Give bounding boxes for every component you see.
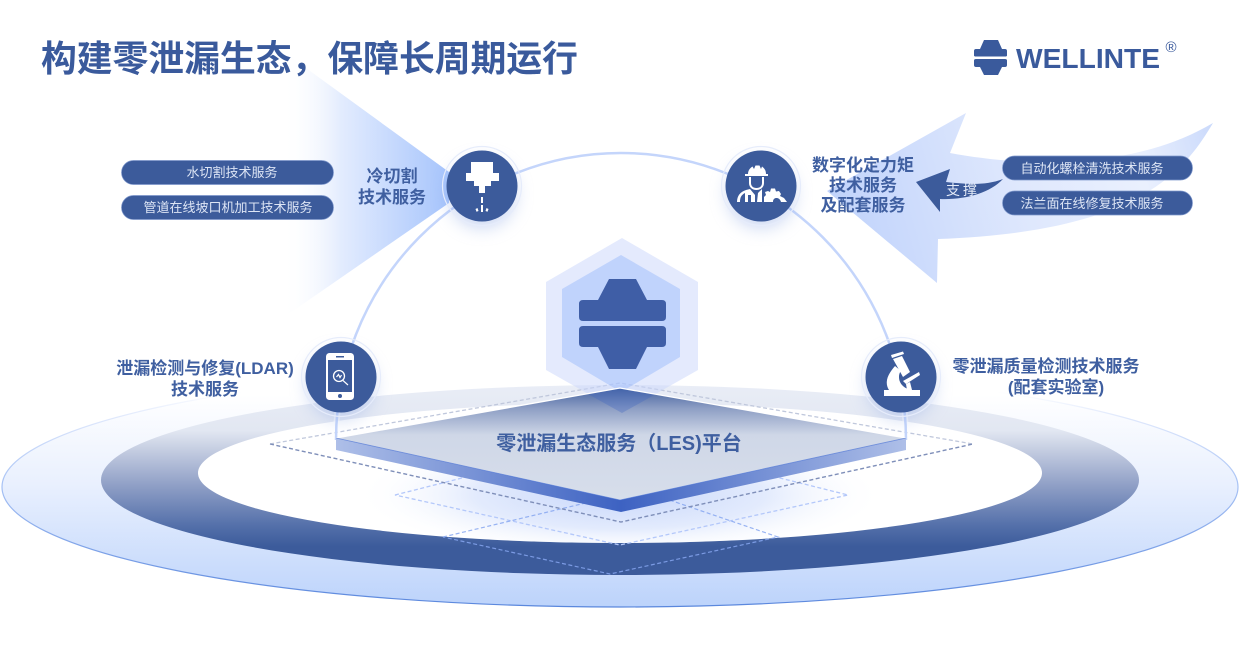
pill: pipe beveling xyxy=(122,196,334,220)
label: LDAR: 泄漏检测与修复(LDAR) xyxy=(116,358,294,378)
panel: base platform ellipses xyxy=(2,367,1238,607)
pill: flange repair xyxy=(1002,191,1192,215)
icon: cutting nozzle xyxy=(442,146,522,227)
icon: worker with gear xyxy=(722,146,800,227)
label: digital torque: 及配套服务 xyxy=(820,195,906,215)
icon: central hexagon logo xyxy=(546,238,698,413)
dark ring xyxy=(101,385,1139,575)
slab highlight xyxy=(336,388,906,438)
label: quality testing: 零泄漏质量检测技术服务 xyxy=(952,356,1140,376)
central platform slab xyxy=(336,388,906,512)
pill: flange repair: 法兰面在线修复技术服务 xyxy=(1020,196,1164,211)
logo: WELLINTE xyxy=(974,39,1177,75)
registered mark: ® xyxy=(1165,39,1177,56)
icon: microscope xyxy=(862,338,940,418)
label: quality testing: (配套实验室) xyxy=(1008,377,1104,397)
label: digital torque: 技术服务 xyxy=(829,176,897,195)
inner white ellipse xyxy=(198,403,1042,543)
lower flange xyxy=(579,326,666,369)
slab front highlight xyxy=(336,438,906,500)
inner blue glow xyxy=(419,474,820,543)
title: 构建零泄漏生态，保障长周期运行 xyxy=(41,39,578,79)
slab top face xyxy=(336,388,906,500)
slab side xyxy=(336,438,906,512)
panel: cold cutting services xyxy=(122,160,426,220)
outer hexagon xyxy=(546,238,698,413)
logo wordmark: WELLINTE xyxy=(1016,43,1160,74)
pill: bolt cleaning xyxy=(1002,156,1192,180)
arrow: support xyxy=(916,169,1003,212)
logo mark xyxy=(974,40,1007,75)
panel: digital torque services xyxy=(812,155,1192,215)
dashed floor diamonds xyxy=(270,383,973,574)
pill: water jet cutting xyxy=(122,160,334,184)
pill: pipe beveling: 管道在线坡口机加工技术服务 xyxy=(143,200,313,215)
upper flange xyxy=(579,279,666,321)
platform title: 零泄漏生态服务（LES)平台 xyxy=(496,431,742,455)
right big curved arrow xyxy=(827,113,1213,283)
inner hexagon xyxy=(562,255,680,392)
hexagon tip showing through slab xyxy=(588,388,656,413)
pill: bolt cleaning: 自动化螺栓清洗技术服务 xyxy=(1020,161,1164,176)
icon: phone LDAR xyxy=(302,338,380,418)
connecting arc xyxy=(336,153,906,440)
pill: water jet cutting: 水切割技术服务 xyxy=(186,165,278,180)
arrow: support: 支撑 xyxy=(946,182,980,198)
label: cold cutting: 冷切割 xyxy=(366,166,418,186)
left fan beam xyxy=(277,47,449,322)
label: cold cutting: 技术服务 xyxy=(358,188,426,207)
label: LDAR: 技术服务 xyxy=(171,380,239,399)
outer ellipse xyxy=(2,367,1238,607)
text reflection xyxy=(500,468,739,472)
label: digital torque: 数字化定力矩 xyxy=(812,155,914,175)
